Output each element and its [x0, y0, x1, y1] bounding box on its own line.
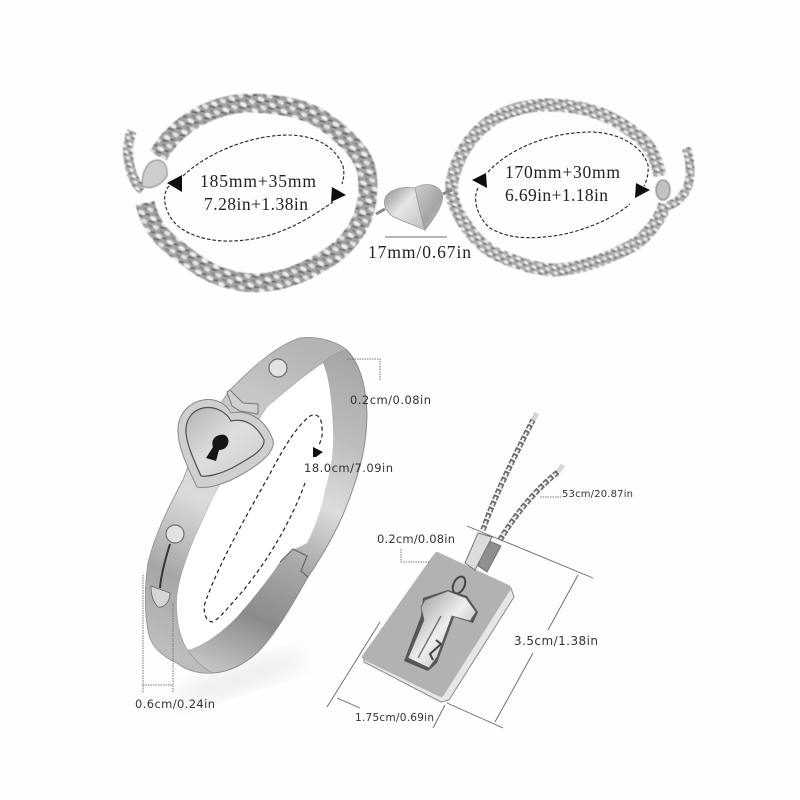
right chain bracelet [451, 105, 690, 270]
heart size label: 17mm/0.67in [368, 242, 471, 262]
pendant width guide [327, 622, 445, 728]
chain length label: 53cm/20.87in [562, 489, 633, 500]
bangle loop arrow [313, 447, 323, 457]
pendant bail back piece [478, 540, 501, 572]
bangle back band [145, 338, 367, 673]
pendant height guide [447, 526, 593, 728]
lock bangle [145, 338, 367, 673]
left chain strand [483, 420, 533, 530]
necklace [364, 413, 563, 702]
dog tag pendant [364, 588, 514, 702]
lower gem [166, 525, 184, 543]
bangle width guide [143, 575, 173, 693]
heart width line [385, 236, 447, 238]
pendant jump ring [450, 575, 468, 595]
left bracelet size label: 185mm+35mm [200, 171, 316, 191]
bangle inner dashed loop [204, 415, 322, 622]
pendant width label: 1.75cm/0.69in [355, 712, 434, 724]
left bracelet size label [200, 171, 316, 214]
bangle front band [145, 338, 347, 673]
chain length guide [540, 496, 561, 498]
pendant thickness guide [401, 549, 430, 562]
bangle shadow [171, 648, 309, 708]
left bracelet dashed loop [165, 135, 344, 241]
left bracelet clasp [142, 160, 167, 188]
right bracelet size label [505, 162, 620, 205]
key cut-out [404, 590, 478, 671]
pendant thickness label: 0.2cm/0.08in [377, 532, 455, 546]
bangle thickness guide [347, 359, 380, 381]
bangle inner opening [177, 363, 333, 650]
right bracelet dashed loop [476, 132, 648, 238]
pendant bail [465, 533, 492, 570]
pendant height label: 3.5cm/1.38in [514, 634, 598, 648]
left chain bracelet [128, 103, 368, 283]
lock crown [227, 390, 258, 414]
left bracelet extension chain [128, 131, 143, 190]
right bracelet size label: 6.69in+1.18in [505, 185, 608, 205]
right bracelet size label: 170mm+30mm [505, 162, 620, 182]
bangle thickness label: 0.2cm/0.08in [350, 393, 431, 407]
magnetic heart charm [376, 184, 452, 230]
right chain strand [500, 472, 558, 540]
keyhole [206, 435, 229, 461]
engraved arrow [160, 544, 170, 588]
key [408, 591, 476, 668]
right bracelet clasp [656, 180, 670, 200]
left bracelet arrows [167, 175, 346, 202]
right bracelet extension chain [668, 148, 690, 206]
bangle hinge [280, 549, 308, 577]
bangle width label: 0.6cm/0.24in [135, 697, 215, 711]
right bracelet arrows [472, 173, 650, 198]
heart lock [178, 400, 273, 488]
left bracelet size label: 7.28in+1.38in [204, 194, 308, 214]
bangle diameter label: 18.0cm/7.09in [304, 461, 393, 475]
upper gem [269, 359, 287, 377]
